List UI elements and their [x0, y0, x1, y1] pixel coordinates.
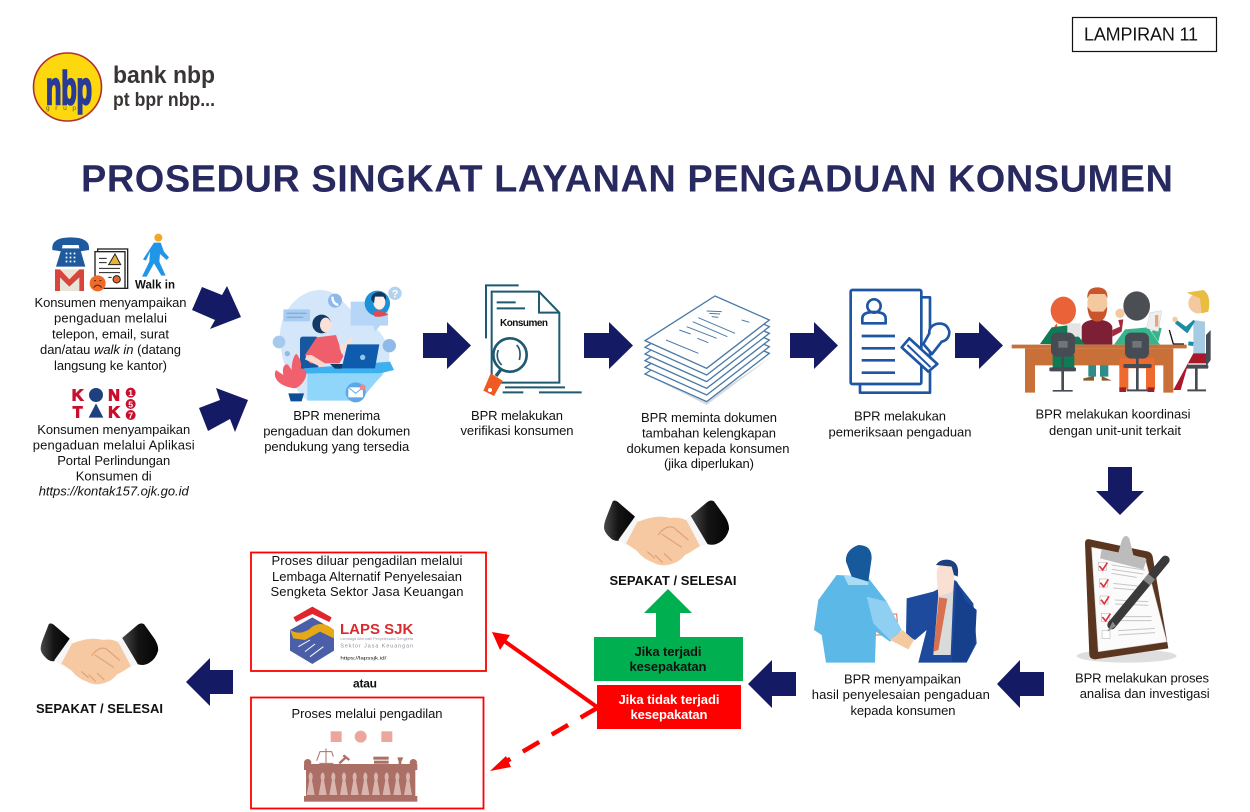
- text: verifikasi: [460, 408, 574, 438]
- arrow: outcome to final: [186, 658, 233, 706]
- text: channels description: telepon, email, surat: [52, 326, 169, 341]
- icon: document stack: [645, 296, 772, 405]
- text: meminta dokumen: BPR meminta dokumen: [641, 410, 777, 425]
- arrow: step 4 to 5: [955, 322, 1003, 369]
- icon: letter: [90, 249, 128, 291]
- logo: kontak 157: N: [108, 387, 120, 404]
- text: menyampaikan: hasil penyelesaian pengaduan: [812, 687, 990, 702]
- illustration: consumer handshake: [814, 545, 977, 663]
- panel: LAPS SJK: Sengketa Sektor Jasa Keuangan: [270, 584, 464, 599]
- text: verifikasi: BPR melakukan: [471, 408, 563, 423]
- arrow: step 7 to outcome: [748, 660, 796, 708]
- text: channels description: dan/atau walk in (datang: [40, 342, 181, 357]
- panel: pengadilan: [251, 698, 484, 808]
- logo: LAPS SJK: Sektor Jasa Keuangan: [340, 644, 413, 650]
- text: analisa: BPR melakukan proses: [1075, 671, 1210, 686]
- text: kontak 157 description: pengaduan melalui Aplikasi: [33, 438, 195, 452]
- logo: LAPS SJK: [290, 607, 414, 664]
- logo: kontak 157: K: [72, 387, 84, 404]
- logo: kontak 157: 1: [128, 388, 133, 398]
- label: LAMPIRAN 11: [1072, 18, 1216, 52]
- icon: verification document: [483, 285, 582, 396]
- label: LAMPIRAN 11: LAMPIRAN 11: [1084, 24, 1198, 44]
- box: jika tidak terjadi kesepakatan: Jika tidak terjadi: [618, 692, 720, 707]
- icon: walking person: [142, 234, 169, 277]
- text: menyampaikan: BPR menyampaikan: [844, 672, 961, 687]
- text: channels description: [34, 295, 186, 373]
- text: pemeriksaan: BPR melakukan: [854, 409, 946, 424]
- text: BPR menerima: [263, 408, 410, 454]
- logo: LAPS SJK: https://lapssjk.id/: [340, 655, 387, 661]
- logo: bank nbp: nbp: [46, 62, 92, 114]
- logo: bank nbp: [34, 53, 215, 121]
- label: sepakat selesai top: SEPAKAT / SELESAI: [610, 573, 736, 588]
- arrow: green up: [644, 589, 692, 638]
- text: verifikasi: verifikasi konsumen: [460, 423, 574, 438]
- text: channels description: Konsumen menyampaikan: [34, 295, 186, 310]
- box: jika terjadi kesepakatan: [594, 637, 743, 681]
- icon: complaint review form: [851, 290, 949, 393]
- arrow: step 1 to 2: [423, 322, 471, 369]
- logo: bank nbp: pt bpr nbp...: [113, 90, 215, 111]
- text: BPR menerima: pengaduan dan dokumen: [263, 424, 410, 439]
- box: jika tidak terjadi kesepakatan: kesepakatan: [630, 707, 708, 722]
- text: koordinasi: dengan unit-unit terkait: [1049, 423, 1181, 438]
- title: PROSEDUR SINGKAT LAYANAN PENGADUAN KONSUMEN: [81, 158, 1173, 200]
- arrow: kontak to BPR: [199, 388, 248, 432]
- text: analisa: analisa dan investigasi: [1080, 686, 1210, 701]
- panel: LAPS SJK: Proses diluar pengadilan melalui: [272, 553, 463, 568]
- text: analisa: [1075, 671, 1210, 701]
- icon: handshake top: [604, 500, 729, 565]
- text: kontak 157 description: Konsumen di: [76, 468, 152, 484]
- illustration: clipboard checklist: [1077, 536, 1177, 663]
- icon: handshake bottom: [41, 623, 158, 684]
- panel: LAPS SJK: Lembaga Alternatif Penyelesaian: [272, 569, 462, 584]
- text: meminta dokumen: (jika diperlukan): [664, 456, 754, 471]
- text: menyampaikan: [812, 672, 990, 718]
- arrow: red to LAPS: [492, 632, 597, 707]
- arrow: step 5 down to 6: [1096, 467, 1144, 515]
- logo: kontak 157: [72, 387, 136, 422]
- logo: bank nbp: bank nbp: [113, 62, 215, 89]
- text: meminta dokumen: tambahan kelengkapan: [642, 426, 776, 441]
- logo: kontak 157: T: [73, 405, 83, 422]
- label: Konsumen: Konsumen: [500, 318, 548, 329]
- text: BPR menerima: pendukung yang tersedia: [264, 439, 410, 454]
- arrow: red dashed to court: [490, 708, 597, 771]
- arrow: channels to BPR: [192, 286, 241, 329]
- logo: LAPS SJK: LAPS SJK: [340, 622, 414, 638]
- label: atau: atau: [353, 677, 377, 691]
- box: jika terjadi kesepakatan: Jika terjadi: [634, 644, 702, 659]
- box: jika tidak terjadi kesepakatan: [597, 685, 741, 729]
- illustration: customer service: [273, 287, 402, 402]
- label: sepakat selesai bottom: SEPAKAT / SELESAI: [36, 701, 163, 716]
- text: kontak 157 description: https://kontak157.ojk.go.id: [39, 484, 189, 499]
- icon: telephone: [52, 237, 89, 267]
- illustration: customer service: ?: [392, 288, 398, 300]
- panel: LAPS SJK: [251, 552, 486, 671]
- panel: pengadilan: Proses melalui pengadilan: [292, 706, 442, 721]
- illustration: team meeting: [1012, 287, 1211, 393]
- arrow: step 3 to 4: [790, 322, 838, 369]
- text: meminta dokumen: dokumen kepada konsumen: [626, 441, 790, 456]
- text: BPR menerima: BPR menerima: [293, 408, 381, 423]
- arrow: step 6 to 7: [997, 660, 1044, 708]
- label: walk in: Walk in: [135, 280, 175, 292]
- box: jika terjadi kesepakatan: kesepakatan: [630, 659, 707, 674]
- logo: kontak 157: 7: [128, 410, 133, 420]
- text: meminta dokumen: [626, 410, 790, 471]
- text: pemeriksaan: [828, 409, 972, 440]
- icon: email: [55, 269, 84, 291]
- arrow: step 2 to 3: [584, 322, 633, 369]
- logo: kontak 157: K: [108, 405, 120, 422]
- text: koordinasi: BPR melakukan koordinasi: [1036, 407, 1191, 422]
- logo: LAPS SJK: Lembaga Alternatif Penyelesaian Sengketa: [340, 637, 413, 641]
- text: channels description: pengaduan melalui: [54, 311, 167, 326]
- text: kontak 157 description: Portal Perlindungan: [57, 453, 170, 468]
- text: kontak 157 description: Konsumen menyampaikan: [37, 422, 190, 437]
- text: pemeriksaan: pemeriksaan pengaduan: [828, 425, 972, 440]
- logo: kontak 157: 5: [128, 399, 133, 409]
- text: koordinasi: [1036, 407, 1191, 438]
- icon group: complaint channels: [52, 234, 169, 291]
- icon: courtroom bench: [304, 731, 417, 802]
- logo: bank nbp: grup: [46, 105, 76, 112]
- text: kontak 157 description: [33, 422, 195, 499]
- text: menyampaikan: kepada konsumen: [850, 703, 956, 718]
- text: channels description: langsung ke kantor): [54, 358, 167, 373]
